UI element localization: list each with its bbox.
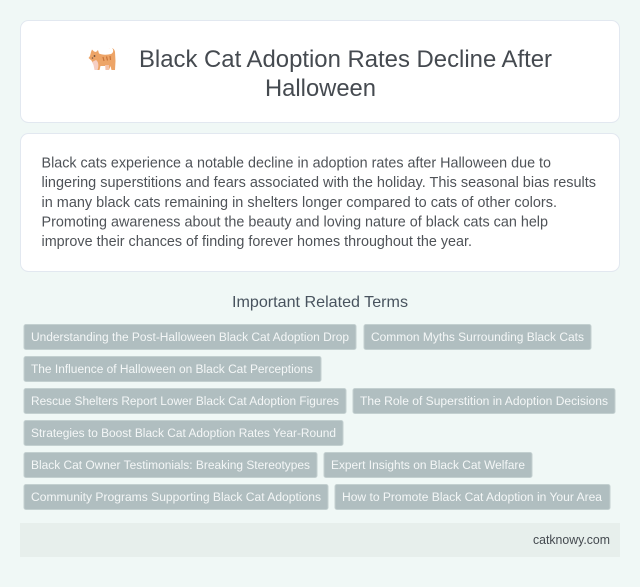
panel: summary paragraph: in many black cats remaining in shelters longer compared to cats of other colors. bbox=[42, 195, 557, 211]
chip: community programs: Community Programs Supporting Black Cat Adoptions bbox=[31, 490, 321, 504]
chip: owner testimonials: Black Cat Owner Testimonials: Breaking Stereotypes bbox=[31, 458, 310, 472]
chip: how to promote: How to Promote Black Cat Adoption in Your Area bbox=[342, 490, 602, 504]
footer bbox=[20, 523, 620, 557]
panel: summary paragraph: improve their chances of finding forever homes throughout the year. bbox=[42, 234, 472, 250]
chip: role of superstition: The Role of Superstition in Adoption Decisions bbox=[360, 394, 608, 408]
title: Black Cat Adoption Rates Decline After bbox=[139, 46, 552, 73]
chip: post-Halloween drop: Understanding the Post-Halloween Black Cat Adoption Drop bbox=[31, 330, 349, 344]
chip: strategies: Strategies to Boost Black Cat Adoption Rates Year-Round bbox=[31, 426, 336, 440]
chip: influence of Halloween: The Influence of Halloween on Black Cat Perceptions bbox=[31, 362, 313, 376]
panel: summary paragraph bbox=[20, 134, 620, 272]
chip: expert insights: Expert Insights on Black Cat Welfare bbox=[331, 458, 525, 472]
title bbox=[139, 46, 552, 102]
panel: summary paragraph: lingering superstitions and fears associated with the holiday. This seasonal bias results bbox=[42, 175, 596, 191]
icon: cat bbox=[88, 48, 116, 70]
chip: how to promote bbox=[335, 484, 610, 510]
chip: common myths bbox=[364, 324, 591, 350]
footer: catknowy.com bbox=[533, 533, 610, 547]
chip: expert insights bbox=[324, 452, 532, 478]
panel: summary paragraph: Promoting awareness about the beauty and loving nature of black cats can help bbox=[42, 214, 548, 230]
chip: post-Halloween drop bbox=[24, 324, 356, 350]
heading: related terms: Important Related Terms bbox=[232, 294, 408, 311]
chip: influence of Halloween bbox=[24, 356, 321, 382]
chip: rescue shelters bbox=[24, 388, 346, 414]
chip: strategies bbox=[24, 420, 343, 446]
chip: owner testimonials bbox=[24, 452, 317, 478]
panel: summary paragraph: Black cats experience a notable decline in adoption rates after Halloween due to bbox=[42, 156, 551, 172]
chip: role of superstition bbox=[353, 388, 615, 414]
chip: community programs bbox=[24, 484, 328, 510]
chip: rescue shelters: Rescue Shelters Report Lower Black Cat Adoption Figures bbox=[31, 394, 339, 408]
chip: common myths: Common Myths Surrounding Black Cats bbox=[371, 330, 584, 344]
title: Halloween bbox=[265, 75, 376, 102]
panel: title card bbox=[20, 20, 620, 122]
